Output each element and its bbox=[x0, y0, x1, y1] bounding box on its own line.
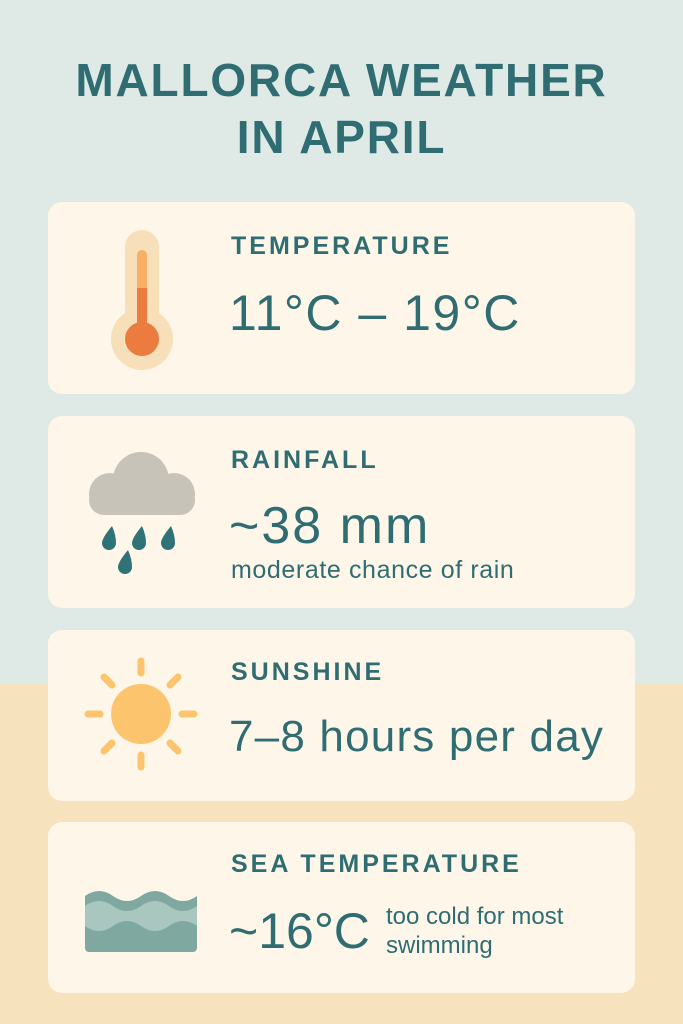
note: rainfall: moderate chance of rain bbox=[231, 556, 514, 584]
icon: thermometer bbox=[111, 230, 173, 370]
value: sunshine: 7–8 hours per day bbox=[229, 712, 604, 761]
note: sea temperature: swimming bbox=[386, 932, 493, 959]
value: rainfall: ~38 mm bbox=[229, 497, 430, 555]
title bbox=[75, 54, 608, 163]
heading: temperature: TEMPERATURE bbox=[231, 232, 452, 260]
panel: sea temperature bbox=[48, 822, 635, 993]
panel: temperature bbox=[48, 202, 635, 394]
heading: sea temperature: SEA TEMPERATURE bbox=[231, 850, 522, 878]
icon: sun bbox=[84, 658, 198, 770]
icon: rain cloud bbox=[89, 452, 195, 574]
note: sea temperature bbox=[386, 903, 564, 959]
title: IN APRIL bbox=[237, 111, 446, 163]
icon: waves bbox=[85, 891, 197, 952]
panel: rainfall bbox=[48, 416, 635, 608]
value: temperature: 11°C – 19°C bbox=[229, 285, 521, 341]
heading: sunshine: SUNSHINE bbox=[231, 658, 384, 686]
note: sea temperature: too cold for most bbox=[386, 903, 563, 930]
title: MALLORCA WEATHER bbox=[75, 54, 608, 106]
panel: sunshine bbox=[48, 630, 635, 801]
heading: rainfall: RAINFALL bbox=[231, 446, 379, 474]
value: sea temperature: ~16°C bbox=[229, 903, 370, 959]
